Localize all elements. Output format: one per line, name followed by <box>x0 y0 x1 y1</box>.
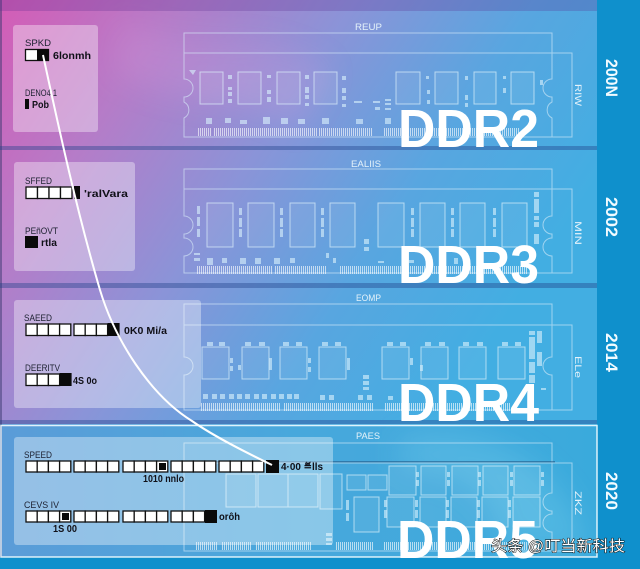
density bar <box>26 510 217 523</box>
module outline <box>184 304 572 410</box>
year: row 3: 2014 <box>602 333 621 373</box>
watermark: 头条 @叮当新科技 <box>491 538 625 555</box>
dark divider <box>184 461 555 462</box>
contact pins <box>198 128 520 136</box>
module label: REUP <box>355 22 382 33</box>
panel: DDR4 specs <box>14 300 201 408</box>
speed value: 'ralVara <box>84 188 128 200</box>
side label: ZKZ <box>572 491 583 515</box>
density label: DEERITV <box>25 363 61 374</box>
density bar <box>26 373 72 386</box>
density label: CEVS IV <box>24 500 60 511</box>
right year column <box>597 0 640 569</box>
contact pins <box>201 403 510 411</box>
panel: DDR2 specs <box>13 25 98 132</box>
heading: DDR4: DDR4 <box>398 373 539 433</box>
speed label: SPKD <box>25 38 51 49</box>
module: DDR3 <box>184 159 583 273</box>
density bar <box>25 236 38 248</box>
heading: DDR2: DDR2 <box>398 99 539 159</box>
speed label: SAEED <box>24 313 52 324</box>
module label: PAES <box>356 431 380 442</box>
heading: DDR3: DDR3 <box>398 235 539 295</box>
small components <box>194 192 539 265</box>
density midpoint value: 1S 00 <box>53 523 77 535</box>
memory chips <box>200 72 534 104</box>
small components <box>206 75 543 124</box>
density value: orôh <box>219 511 240 523</box>
speed value: 6lonmh <box>53 50 91 62</box>
small components <box>326 472 544 545</box>
contact pins <box>197 266 527 274</box>
corner marker <box>189 70 196 75</box>
panel: DDR5 specs <box>14 437 333 545</box>
side label: ELe <box>572 356 583 378</box>
year: row 4: 2020 <box>602 472 621 510</box>
speed value: 4·00 ≝lls <box>281 461 323 473</box>
density bar <box>25 99 29 109</box>
small components <box>203 331 546 400</box>
module: DDR5 <box>184 431 583 551</box>
density value: Pob <box>32 99 49 111</box>
speed midpoint value: 1010 nnlo <box>143 473 184 485</box>
year: row 2: 2002 <box>602 197 621 237</box>
module: DDR4 <box>184 293 583 410</box>
row 4 highlight border <box>1 426 597 557</box>
module outline <box>184 169 572 273</box>
top band <box>0 0 597 11</box>
heading: DDR5: DDR5 <box>397 510 538 569</box>
contact pins <box>196 542 534 550</box>
density value: rtla <box>41 237 57 249</box>
side label: MIN <box>572 221 583 245</box>
speed bar <box>26 460 279 473</box>
speed label: SPEED <box>24 450 52 461</box>
density label: DENO4 1 <box>25 88 57 99</box>
speed label: SFFED <box>25 176 52 187</box>
module: DDR2 <box>184 22 583 137</box>
row separators <box>0 146 597 424</box>
module outline <box>184 33 572 137</box>
side label: RIW <box>572 84 583 106</box>
module label: EALIIS <box>351 159 381 170</box>
memory chips <box>207 203 527 247</box>
speed bar <box>26 186 80 199</box>
module outline <box>184 443 572 551</box>
panel: DDR3 specs <box>14 162 135 271</box>
density value: 4S 0o <box>73 375 97 387</box>
growth curve <box>43 55 272 465</box>
speed bar <box>26 49 49 61</box>
speed value: 0K0 Mi/a <box>124 325 167 337</box>
density label: PEñOVT <box>25 226 58 237</box>
memory chips <box>202 347 525 379</box>
memory chips <box>226 466 540 532</box>
module label: EOMP <box>356 293 381 304</box>
bottom band <box>0 557 640 569</box>
speed bar <box>26 323 120 336</box>
year: row 1: 200N <box>602 59 621 97</box>
